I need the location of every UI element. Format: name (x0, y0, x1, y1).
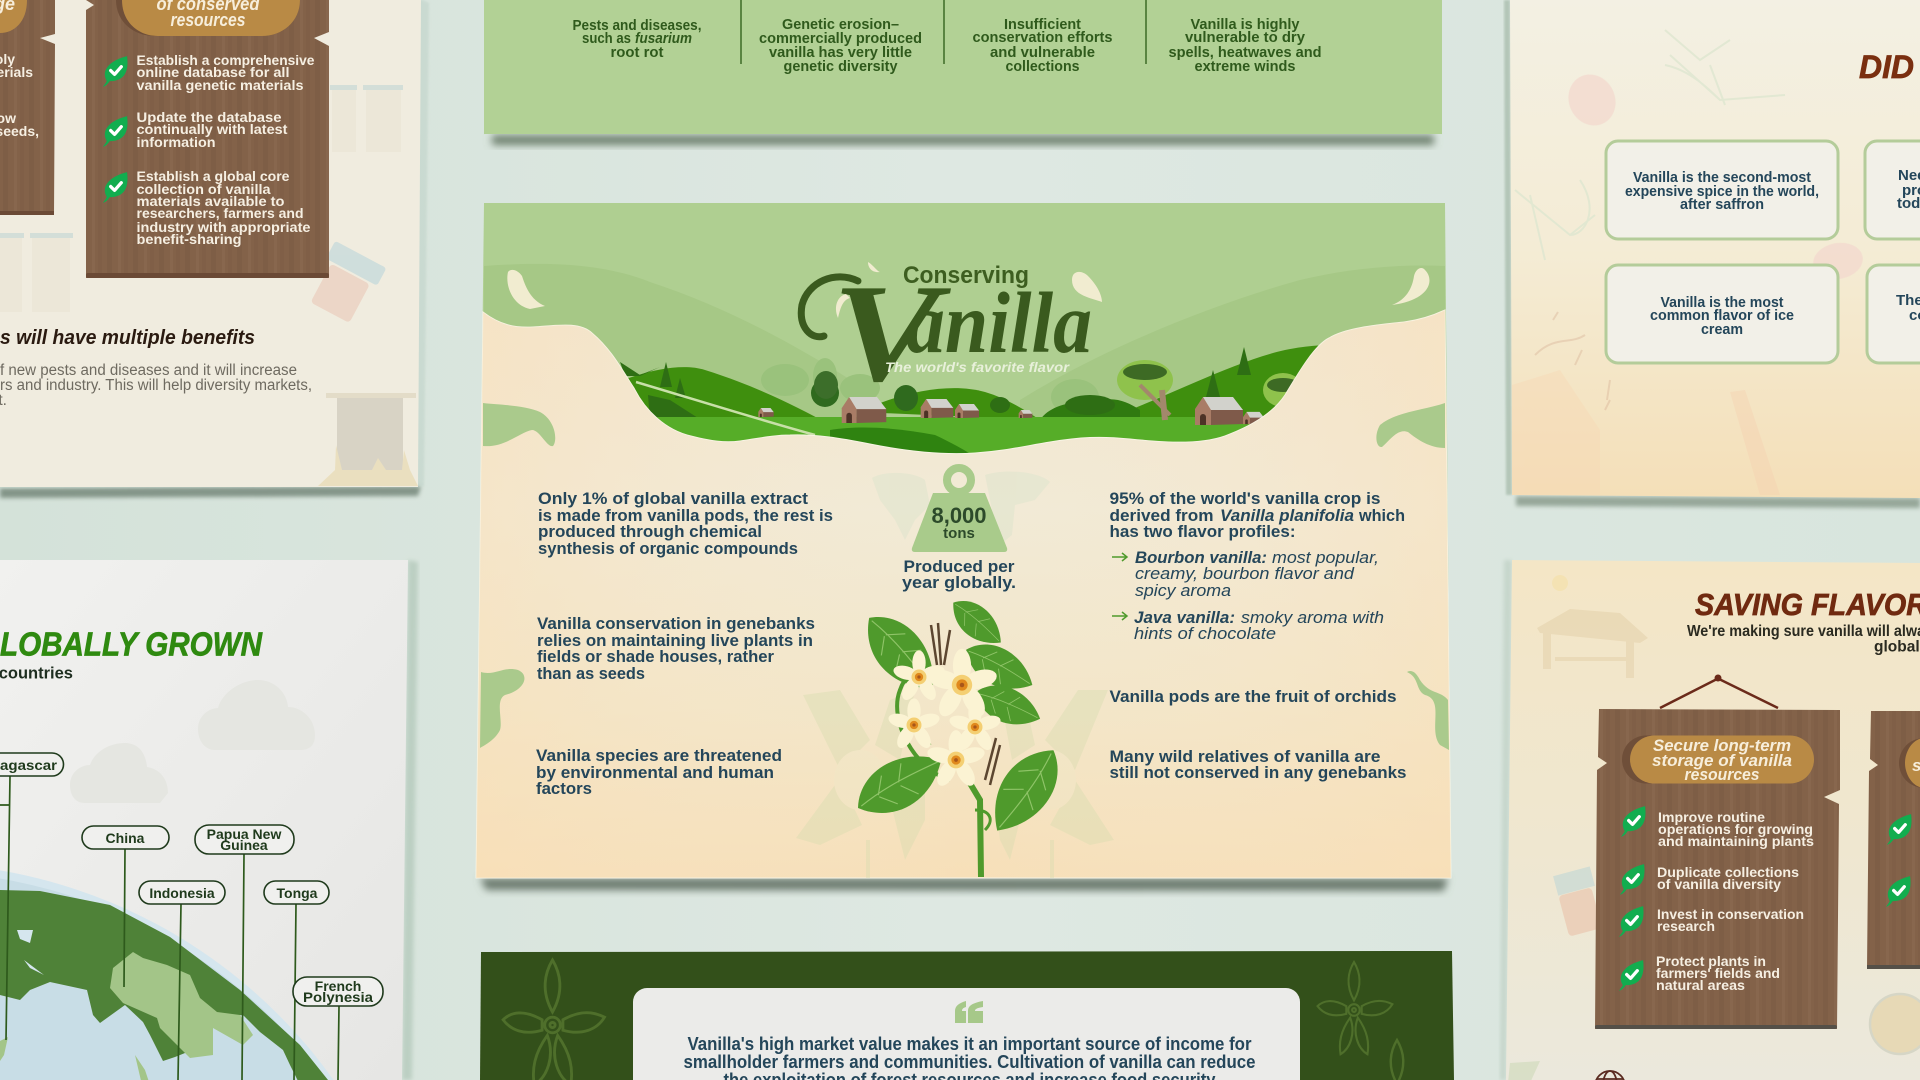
right fact: wild relatives: Many wild relatives of vanilla are (1110, 747, 1380, 766)
java text: Java vanilla: (1134, 608, 1235, 627)
label: China (82, 826, 169, 849)
benefits paragraph: rs and industry. This will help diversity markets, (0, 377, 312, 394)
right fact: flavor profiles: has two flavor profiles: (1110, 522, 1296, 541)
icon: quotation mark (955, 1001, 983, 1023)
item text: collection of vanilla (136, 181, 271, 197)
item text: Establish a comprehensive (136, 52, 315, 68)
java text (1134, 608, 1384, 643)
heading: did: DID (1859, 49, 1914, 85)
heading pill: Secure long-term (1653, 736, 1791, 755)
stamens (931, 623, 1000, 785)
left fact: genebanks (537, 614, 815, 683)
threat: climate vulnerability (1168, 17, 1322, 75)
item text: industry with appropriate (136, 219, 311, 235)
left fact: threatened species: by environmental and human (536, 763, 774, 782)
hills (484, 264, 1445, 450)
fact card: second most expensive spice: after saffron (1680, 196, 1764, 213)
fact card: clipped right: tod (1897, 195, 1920, 212)
panel: conserving vanilla (centre) (476, 203, 1451, 891)
right fact: flavor profiles: Vanilla planifolia (1220, 506, 1354, 525)
label: Indonesia: Indonesia (149, 885, 215, 901)
threat: pests and diseases: fusarium (635, 31, 692, 47)
illustration: faint round dish (1870, 994, 1920, 1054)
label: Indonesia (139, 881, 225, 904)
panel: conservation actions (top left) (0, 0, 429, 498)
item text: Protect plants in (1656, 953, 1766, 969)
threat: genetic erosion: genetic diversity (784, 59, 898, 75)
illustration: faint drying pot (318, 393, 418, 486)
illustration: faint tipped jar (304, 241, 386, 326)
title (801, 256, 1092, 411)
label: Papua New Guinea (195, 825, 294, 854)
heading pill (116, 0, 300, 36)
fact card: second most expensive spice: Vanilla is the second-most (1633, 169, 1811, 186)
item text: materials available to (136, 193, 284, 209)
fact card: ice cream (1606, 265, 1838, 363)
illustration: faint hut, sun, jar and plant (1508, 575, 1648, 1080)
illustration: faint ghost plants (796, 690, 1114, 878)
panel: saving flavor (bottom right) (1500, 560, 1920, 1080)
icon: check leaf (1621, 806, 1646, 837)
threat: climate vulnerability: extreme winds (1194, 59, 1296, 75)
icon: check leaf (103, 172, 128, 203)
threat: climate vulnerability: Vanilla is highly (1190, 17, 1300, 33)
dark land (0, 890, 332, 1080)
threat: insufficient conservation: conservation efforts (972, 30, 1112, 46)
weight body (912, 493, 1007, 552)
left fact: genebanks: fields or shade houses, rather (537, 647, 774, 666)
droplet on V (836, 294, 850, 318)
stem and vines (897, 665, 990, 877)
left fact: threatened species (536, 746, 782, 798)
leader lines (0, 776, 339, 1080)
heading: globally grown: LOBALLY GROWN (0, 626, 263, 662)
faint world map (872, 471, 1050, 545)
item text: information (136, 134, 216, 150)
item text: continually with latest (136, 121, 288, 137)
fact card: second most expensive spice: expensive spice in the world, (1625, 183, 1819, 200)
landscape scene (600, 345, 1340, 470)
item text: Invest in conservation (1657, 906, 1804, 922)
item text: online database for all (136, 64, 290, 80)
wooden board: clipped right (1867, 711, 1920, 969)
farm houses (758, 397, 1264, 425)
item text: benefit-sharing (136, 231, 242, 247)
wooden board: secure long-term storage (1595, 709, 1840, 1029)
bourbon text: spicy aroma (1135, 581, 1231, 600)
title: anilla (906, 274, 1092, 371)
farm path (636, 382, 815, 435)
heading: multiple benefits: s will have multiple benefits (0, 327, 255, 349)
item text (136, 109, 288, 150)
stat caption: Produced per (904, 557, 1015, 576)
right fact: flavor profiles: derived from (1110, 506, 1214, 525)
threat: pests and diseases: such as (582, 31, 631, 47)
willow trees (814, 360, 1303, 420)
left fact: genebanks: relies on maintaining live plants in (537, 631, 813, 650)
stat: 8,000 tons weight (872, 468, 1050, 552)
icon: check leaf (1619, 960, 1644, 991)
dividers (741, 0, 1146, 64)
hanging rope (1660, 674, 1778, 708)
item text (1657, 906, 1804, 934)
illustration: faint storage jars (0, 85, 403, 312)
label: French Polynesia: Polynesia (303, 989, 373, 1005)
label: French Polynesia (293, 977, 383, 1006)
fact card: clipped right lower (1867, 265, 1920, 363)
bourbon text: Bourbon vanilla: (1135, 548, 1267, 567)
label: Madagascar: agascar (0, 757, 58, 773)
item text: Duplicate collections (1657, 864, 1799, 880)
right fact: orchids: Vanilla pods are the fruit of orchids (1110, 687, 1396, 706)
item text: and maintaining plants (1658, 833, 1814, 849)
item text: research (1657, 918, 1715, 934)
subheading: countries (0, 664, 73, 682)
wooden board: first action column (0, 0, 55, 215)
left fact: threatened species: factors (536, 779, 592, 798)
left fact: 1 percent: is made from vanilla pods, the rest is (538, 506, 833, 525)
icon: check leaf (1619, 906, 1644, 937)
distant trees (761, 358, 1099, 415)
stat caption: year globally. (902, 573, 1016, 592)
threat: pests and diseases: root rot (610, 45, 664, 61)
arrow: java (1112, 612, 1127, 620)
benefits paragraph (0, 362, 312, 409)
wooden board: access to conserved resources (86, 0, 329, 278)
left fact: 1 percent (538, 489, 833, 558)
left fact: genebanks: than as seeds (537, 664, 645, 683)
illustration: faint ice cream (1512, 312, 1780, 495)
back hills (612, 345, 1340, 430)
bourbon text: most popular, (1272, 548, 1379, 567)
fact card: ice cream: common flavor of ice (1650, 307, 1794, 324)
globe (0, 863, 429, 1080)
icon: check leaf (103, 56, 128, 87)
quote text: Vanilla's high market value makes it an important source of income for (688, 1034, 1252, 1054)
grass (600, 417, 1320, 470)
left fact: 1 percent: produced through chemical (538, 522, 762, 541)
arrow: bourbon (1112, 553, 1127, 561)
icon: flower outline left (503, 960, 604, 1080)
conifers and bushes (620, 347, 1251, 420)
item text: farmers' fields and (1656, 965, 1780, 981)
item text (136, 52, 315, 93)
leaves (852, 602, 950, 704)
heading pill: storage of vanilla (1652, 751, 1792, 770)
icon: check leaf (1887, 814, 1912, 845)
left fact: 1 percent: Only 1% of global vanilla extract (538, 489, 808, 508)
icon: check leaf (1886, 876, 1911, 907)
illustration: vanilla orchid plant (846, 591, 1073, 877)
weight ring (947, 468, 971, 492)
label: Papua New Guinea: Guinea (220, 837, 268, 853)
left fact: 1 percent: synthesis of organic compounds (538, 539, 798, 558)
fact card: ice cream: cream (1701, 321, 1743, 338)
threat: insufficient conservation: Insufficient (1004, 17, 1081, 33)
heading pill: resources (1684, 765, 1760, 784)
flowers (892, 650, 946, 703)
fact card: ice cream: Vanilla is the most (1660, 294, 1784, 311)
light land: lower islands (0, 1037, 150, 1080)
java text: smoky aroma with (1241, 608, 1384, 627)
item text: of vanilla diversity (1657, 876, 1781, 892)
stat caption (902, 557, 1016, 592)
island cuts (17, 930, 44, 975)
threat: climate vulnerability: spells, heatwaves and (1168, 45, 1322, 61)
subheading: global (1874, 638, 1920, 656)
dark foreground hill (830, 428, 980, 460)
threat: insufficient conservation (972, 17, 1112, 75)
heading pill: resources (170, 10, 246, 30)
title: Conserving (903, 262, 1029, 289)
left fact: threatened species: Vanilla species are threatened (536, 746, 782, 765)
heading pill (1622, 736, 1814, 784)
threat: pests and diseases (572, 18, 702, 61)
green blobs on side edges (480, 403, 1449, 750)
item text: Establish a global core (136, 168, 290, 184)
quote text: smallholder farmers and communities. Cultivation of vanilla can reduce (684, 1052, 1256, 1072)
illustration: faint vanilla sprigs (1515, 30, 1785, 260)
label: Tonga: Tonga (277, 885, 318, 901)
icon: globe (1595, 1071, 1625, 1080)
item text: Update the database (136, 109, 282, 125)
threat: insufficient conservation: collections (1006, 59, 1080, 75)
right fact: wild relatives: still not conserved in any genebanks (1110, 763, 1406, 782)
title: V (832, 256, 951, 411)
threat: climate vulnerability: vulnerable to dry (1185, 30, 1305, 46)
label: Papua New Guinea: Papua New (207, 826, 281, 842)
icon: flower outline lower right (1355, 1040, 1441, 1080)
illustration: faint macarons (1560, 67, 1866, 283)
panel: quote (bottom centre) (480, 951, 1454, 1080)
item text: vanilla genetic materials (136, 77, 304, 93)
fact card: second most expensive spice (1606, 141, 1838, 239)
panel: did you know (top right) (1504, 0, 1920, 508)
cream droplets (507, 262, 1429, 309)
quote card (633, 988, 1300, 1080)
clouds (70, 680, 315, 803)
right fact: flavor profiles: which (1358, 506, 1405, 525)
benefits paragraph: f new pests and diseases and it will increase (0, 362, 297, 379)
quote text (684, 1034, 1256, 1080)
subheading (1687, 623, 1920, 656)
item text (136, 168, 311, 247)
threat: genetic erosion: commercially produced (759, 31, 922, 47)
stat: 8,000 tons weight: tons (943, 525, 975, 542)
java text: hints of chocolate (1134, 624, 1276, 643)
tagline: The world's favorite flavor (885, 359, 1071, 375)
fact card: clipped right (1865, 141, 1920, 239)
left fact: genebanks: Vanilla conservation in genebanks (537, 614, 815, 633)
light land: China (110, 952, 253, 1058)
bourbon text: creamy, bourbon flavor and (1135, 564, 1355, 583)
threat: genetic erosion: Genetic erosion– (782, 17, 899, 33)
right fact: flavor profiles: 95% of the world's vanilla crop is (1110, 489, 1380, 508)
item text: Improve routine (1658, 809, 1765, 825)
label: French Polynesia: French (315, 978, 361, 994)
threat: genetic erosion: vanilla has very little (769, 45, 912, 61)
right fact: flavor profiles (1110, 489, 1405, 643)
cream background wave (476, 310, 1451, 878)
threat: genetic erosion (759, 17, 922, 75)
item text: natural areas (1656, 977, 1745, 993)
stat: 8,000 tons weight: 8,000 (931, 503, 987, 528)
threat: pests and diseases: Pests and diseases, (572, 18, 702, 34)
panel: threats to vanilla (top centre) (484, 0, 1442, 145)
item text (1656, 953, 1780, 993)
item text (1658, 809, 1814, 849)
item text: researchers, farmers and (136, 205, 304, 221)
item text (1657, 864, 1799, 892)
threat: insufficient conservation: and vulnerable (990, 45, 1095, 61)
label: Madagascar (0, 753, 64, 776)
label: China: China (106, 830, 145, 846)
item text: operations for growing (1658, 821, 1813, 837)
right fact: wild relatives (1110, 747, 1406, 782)
bourbon text (1135, 548, 1379, 600)
label: Tonga (264, 881, 329, 904)
icon: check leaf (103, 116, 128, 147)
panel: vanilla is globally grown (bottom left) (0, 560, 429, 1080)
icon: check leaf (1620, 864, 1645, 895)
icon: flower outline right (1318, 962, 1392, 1054)
